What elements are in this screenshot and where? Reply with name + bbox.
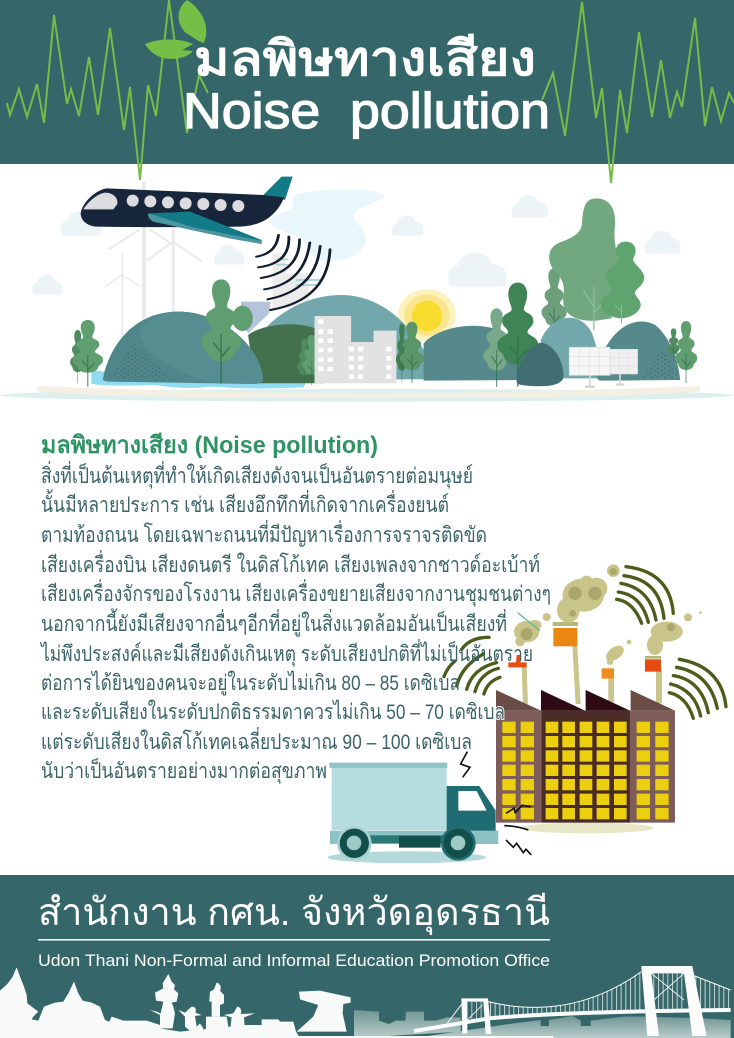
body text: ต่อการได้ยินของคนจะอยู่ในระดับไม่เกิน 80 – 85 เดซิเบล xyxy=(41,670,460,696)
city buildings xyxy=(315,316,396,383)
sound waves from plane xyxy=(257,235,330,310)
body text: นอกจากนี้ยังมีเสียงจากอื่นๆอีกที่อยู่ในสิ่งแวดล้อมอันเป็นเสียงที่ xyxy=(41,608,507,637)
footer rule xyxy=(38,939,550,941)
bridge hangers xyxy=(488,972,641,1020)
wind turbines xyxy=(105,182,202,340)
stray green mark xyxy=(518,613,540,631)
clouds xyxy=(32,195,681,295)
body text: ไม่พึงประสงค์และมีเสียงดังเกินเหตุ ระดับเสียงปกติที่ไม่เป็นอันตราย xyxy=(39,639,533,667)
icon: leaves xyxy=(145,0,206,59)
plane xyxy=(81,177,293,244)
water under the bridge xyxy=(414,1016,731,1038)
big background trees xyxy=(542,198,644,342)
title: english: Noise pollution xyxy=(183,83,550,139)
factory building xyxy=(496,690,675,823)
lightning marks xyxy=(461,752,531,855)
distant city xyxy=(354,1010,461,1038)
body text: นับว่าเป็นอันตรายอย่างมากต่อสุขภาพ xyxy=(41,756,327,784)
truck xyxy=(327,763,498,863)
footer skyline: landmark silhouettes xyxy=(0,967,553,1038)
hills xyxy=(103,295,680,384)
body text: และระดับเสียงในระดับปกติธรรมดาควรไม่เกิน 50 – 70 เดซิเบล xyxy=(41,699,505,724)
haze xyxy=(270,189,384,262)
heartbeat wave: right xyxy=(542,2,734,183)
sun xyxy=(398,289,456,341)
body text: แต่ระดับเสียงในดิสโก้เทคเฉลี่ยประมาณ 90 – 100 เดซิเบล xyxy=(41,727,472,754)
chimneys xyxy=(522,645,662,704)
illustration: factory and truck xyxy=(327,564,726,863)
body text: ตามท้องถนน โดยเฉพาะถนนที่มีปัญหาเรื่องการจราจรติดขัด xyxy=(41,520,487,547)
smoke xyxy=(514,564,702,665)
body text: นั้นมีหลายประการ เช่น เสียงอึกทึกที่เกิดจากเครื่องยนต์ xyxy=(41,489,449,517)
footer title: สำนักงาน กศน. จังหวัดอุดรธานี xyxy=(38,892,550,935)
bridge structure xyxy=(414,972,731,1031)
right foreground trees, hill and solar panels xyxy=(396,283,697,388)
background buildings xyxy=(241,253,321,333)
body text xyxy=(39,461,551,784)
footer skyline: bridge and city xyxy=(354,966,731,1038)
body heading: มลพิษทางเสียง (Noise pollution) xyxy=(41,432,378,459)
footer subtitle: Udon Thani Non-Formal and Informal Education Promotion Office xyxy=(38,951,550,970)
chimney caps xyxy=(508,622,661,679)
body text: สิ่งที่เป็นต้นเหตุที่ทำให้เกิดเสียงดังจนเป็นอันตรายต่อมนุษย์ xyxy=(41,461,473,489)
body text: เสียงเครื่องจักรของโรงงาน เสียงเครื่องขยายเสียงจากงานชุมชนต่างๆ xyxy=(41,579,551,607)
body text: เสียงเครื่องบิน เสียงดนตรี ในดิสโก้เทค เสียงเพลงจากชาวด์อะเบ้าท์ xyxy=(41,550,540,577)
title: thai: มลพิษทางเสียง xyxy=(194,33,536,86)
factory shadow xyxy=(520,823,653,833)
illustration: landscape xyxy=(0,182,734,402)
ground and platform xyxy=(0,370,734,402)
heartbeat wave: left xyxy=(7,0,208,180)
footer band xyxy=(0,875,734,1038)
header band xyxy=(0,0,734,164)
left and centre trees xyxy=(70,279,322,387)
factory sound waves xyxy=(444,567,726,718)
